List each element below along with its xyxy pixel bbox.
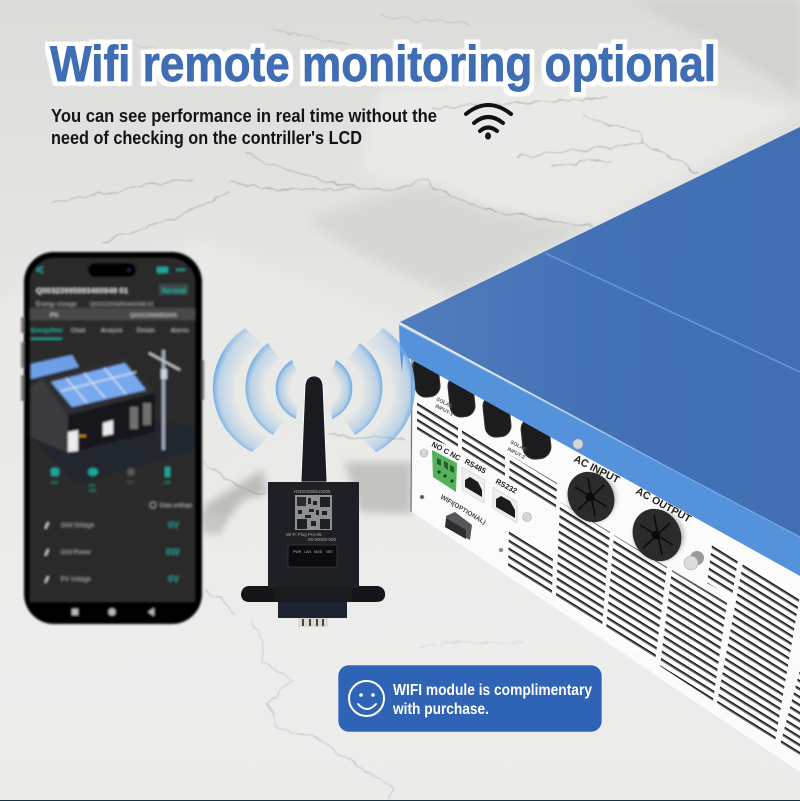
phone app mockup: Energyflow — [31, 328, 63, 334]
callout text: WIFI module is complimentary — [393, 682, 592, 699]
module LED window: NET — [326, 550, 334, 554]
port labels: SOLAR — [509, 439, 528, 453]
grounding screw — [684, 551, 704, 570]
phone app mockup: Normal — [162, 288, 186, 295]
inverter unit — [399, 127, 800, 772]
module LED window: LAN — [304, 550, 311, 554]
subtitle — [51, 106, 437, 148]
icon: smiley — [349, 681, 384, 716]
AC input gland — [559, 463, 623, 531]
port labels: INPUT-1 — [434, 403, 454, 418]
data rows: 0W — [166, 547, 180, 557]
energy flow status icons: 0W — [51, 480, 59, 485]
title: Wifi remote monitoring optional — [50, 36, 716, 92]
inverter rear panel — [412, 352, 800, 772]
module label text: Wi-Fi Plug Pro-05 — [286, 532, 322, 537]
phone app mockup: Data settings — [160, 503, 192, 509]
port labels: AC INPUT — [572, 453, 622, 486]
callout: complimentary wifi module — [338, 665, 602, 732]
port labels: AC OUTPUT — [634, 485, 693, 526]
port labels: SOLAR — [435, 396, 454, 410]
phone app mockup: Chart — [71, 328, 86, 334]
data rows: 0V — [168, 520, 179, 530]
port labels: INPUT-2 — [506, 446, 526, 461]
phone app mockup: < — [36, 262, 44, 277]
phone app mockup: ••• — [176, 265, 185, 275]
energy flow status icons: 0% — [89, 483, 96, 488]
subtitle: You can see performance in real time without the — [51, 106, 437, 126]
phone app mockup: Q00323995893460948 01 — [90, 302, 154, 308]
port labels: RS485 — [463, 457, 488, 476]
port labels: RS232 — [494, 477, 519, 496]
ventilation louvers — [417, 400, 800, 757]
wifi module — [241, 376, 385, 627]
green terminal block — [432, 450, 457, 492]
phone app mockup: Alarms — [171, 328, 189, 334]
phone app mockup: Details — [137, 328, 155, 334]
module connector — [278, 602, 347, 618]
callout text — [392, 682, 592, 718]
icon: wifi symbol — [466, 105, 511, 140]
data rows: Grid Voltage — [61, 523, 95, 529]
data rows — [44, 520, 180, 584]
subtitle: need of checking on the contriller's LCD — [51, 128, 362, 148]
module LED window — [288, 545, 337, 567]
solar input glands — [412, 354, 552, 460]
connector pins — [298, 618, 328, 627]
RS232 port — [493, 487, 517, 523]
module flange — [241, 586, 385, 602]
lid top face — [400, 127, 800, 538]
port labels: WIFI(OPTIONAL) — [439, 494, 487, 526]
AC output gland — [623, 500, 691, 570]
phone app mockup: Energy storage — [36, 302, 77, 308]
phone app mockup: Q00323995893466 — [130, 313, 177, 319]
phone app mockup: PN — [50, 313, 58, 319]
module label text — [286, 489, 337, 542]
module body — [268, 482, 359, 588]
module label text: 00-00000-000 — [308, 537, 337, 542]
energy flow status icons: 0W — [164, 480, 172, 485]
DB9 wifi connector — [445, 512, 472, 540]
module antenna — [301, 376, 327, 482]
lid front strip — [399, 325, 800, 576]
port labels: NO C NC — [430, 440, 463, 463]
phone app mockup — [21, 252, 204, 624]
module LED window: MOD — [314, 550, 323, 554]
data rows: 0V — [168, 574, 179, 584]
RS485 port — [462, 467, 485, 503]
illustration: house with solar panels — [31, 350, 195, 483]
QR code — [295, 495, 332, 530]
module LED window: PWR — [293, 550, 302, 554]
phone navigation bar — [72, 608, 154, 616]
panel screws — [420, 439, 583, 552]
callout text: with purchase. — [392, 701, 489, 718]
wireless signal arcs — [213, 328, 415, 452]
energy flow status icons: 0W — [127, 480, 135, 485]
port labels — [430, 396, 693, 526]
data rows: PV Voltage — [61, 577, 91, 583]
energy flow status icons — [51, 467, 172, 493]
phone app mockup: Analysis — [101, 328, 123, 334]
lid seam — [545, 253, 800, 372]
energy flow status icons: 0W — [89, 488, 97, 493]
phone app mockup: Q00323995893460948 01 — [36, 286, 128, 295]
data rows: Grid Power — [61, 550, 91, 556]
module label text: H2D03295b10005 — [294, 489, 331, 494]
